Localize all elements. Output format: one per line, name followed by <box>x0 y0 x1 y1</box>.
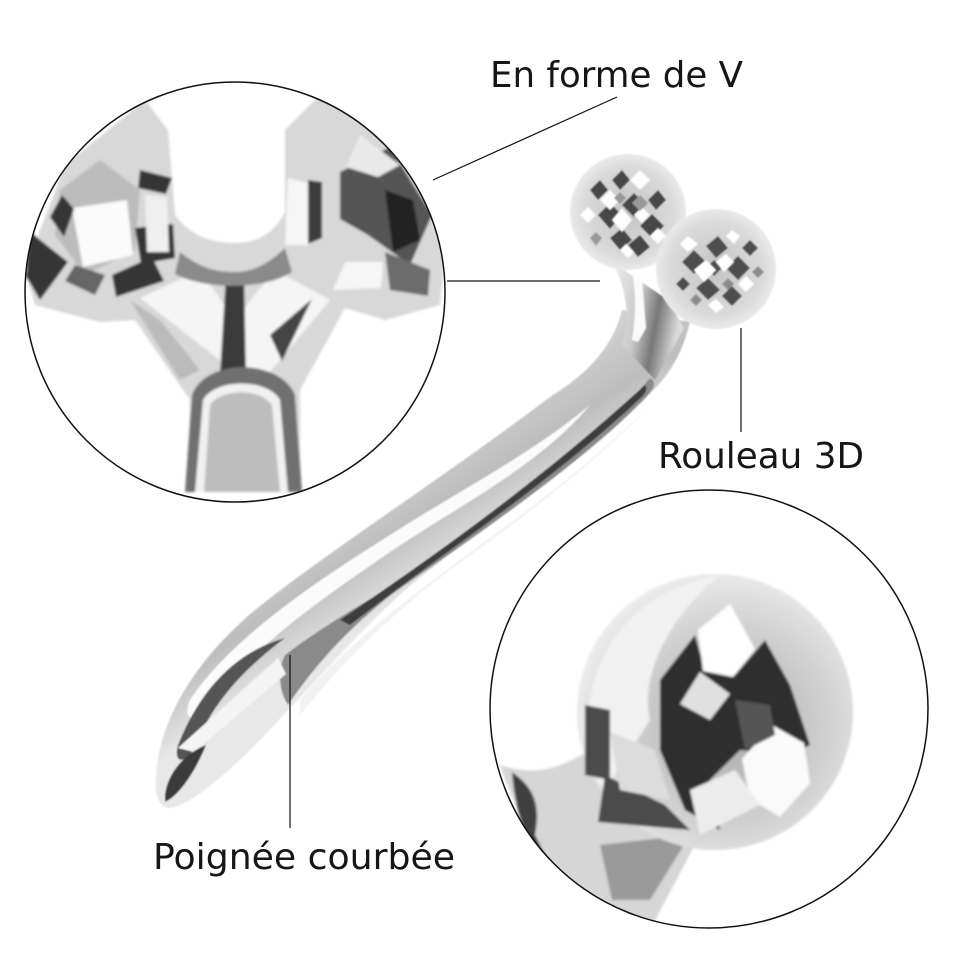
left arm facets <box>55 160 140 275</box>
rear ball <box>570 154 686 270</box>
label: V shape: En forme de V <box>490 55 743 96</box>
leader line: 3D roller <box>740 328 742 432</box>
callout circle: V shape detail <box>20 80 450 505</box>
handle tip reflection <box>177 638 285 760</box>
front ball <box>656 209 776 329</box>
handle dark streak <box>280 378 654 705</box>
circle outline: V shape <box>25 82 445 502</box>
callout circle: 3D roller detail <box>500 574 854 920</box>
right arm facets <box>340 147 432 265</box>
stem <box>612 262 684 380</box>
leader line: connector to roller <box>447 280 600 282</box>
leader line: V shape <box>433 97 617 180</box>
neck <box>500 754 693 920</box>
label: 3D roller: Rouleau 3D <box>658 436 864 477</box>
ball <box>577 574 853 850</box>
label: curved handle: Poignée courbée <box>153 837 455 878</box>
handle lower light strip <box>300 405 650 715</box>
arms <box>27 99 444 449</box>
U handle <box>185 367 302 492</box>
dark facets <box>660 635 810 830</box>
product: roller with curved handle <box>156 154 776 808</box>
circle outline: 3D roller <box>490 490 928 928</box>
neck crossing <box>140 270 330 372</box>
handle highlight <box>187 405 590 718</box>
handle <box>156 310 690 808</box>
leader line: curved handle <box>289 655 291 828</box>
